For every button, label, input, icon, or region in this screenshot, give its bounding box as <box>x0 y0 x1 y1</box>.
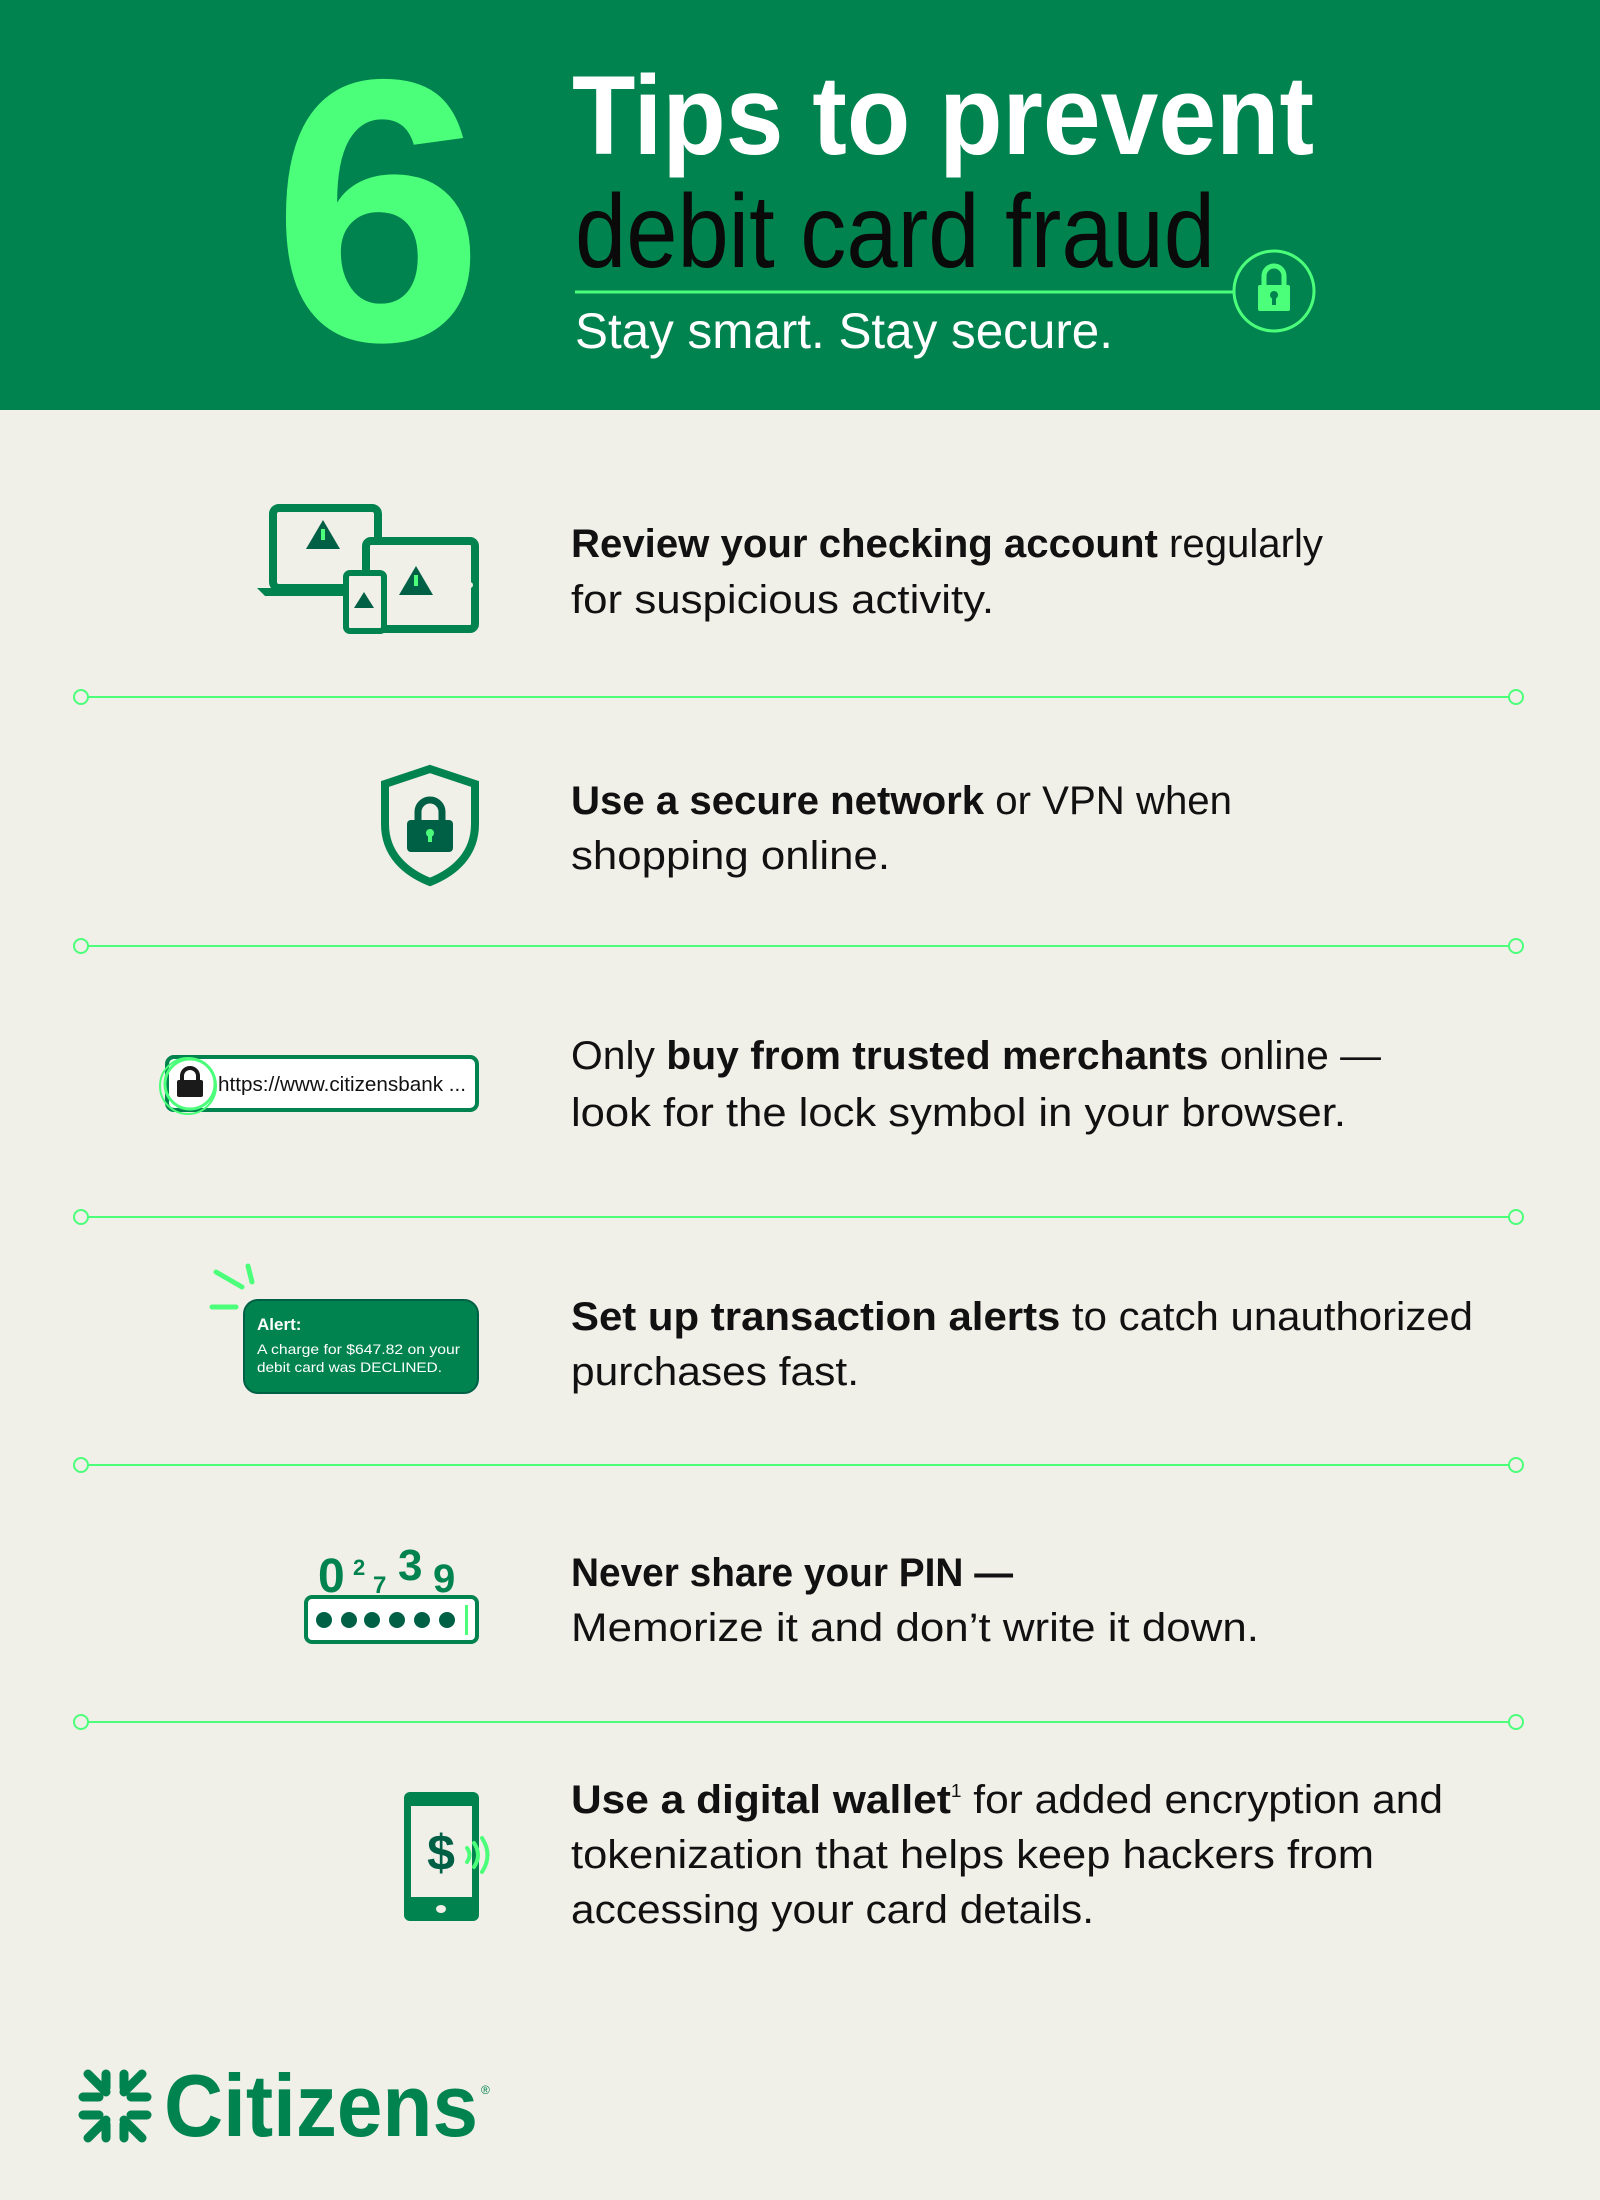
text: tip 6: Use a digital wallet <box>571 1778 951 1822</box>
text: tip 2: Use a secure network or VPN when <box>571 779 1232 823</box>
icon: devices with warnings <box>257 508 475 631</box>
logo: Citizens: ® <box>481 2083 490 2097</box>
icon: PIN entry: 0 <box>318 1550 345 1603</box>
icon: phone wallet <box>404 1792 488 1921</box>
icon: alert message: A charge for $647.82 on your <box>257 1341 460 1357</box>
text: tip 6: for added encryption and <box>961 1778 1443 1822</box>
text: for suspicious activity. <box>571 578 994 622</box>
text: tip 6: 1 <box>951 1781 961 1801</box>
text: purchases fast. <box>571 1350 859 1394</box>
text: shopping online. <box>571 834 890 878</box>
icon: header lock <box>575 251 1314 331</box>
title line 1: Tips to prevent <box>572 53 1314 178</box>
subtitle: Stay smart. Stay secure. <box>575 303 1113 359</box>
icon: phone wallet: $ <box>427 1825 455 1881</box>
title line 2: debit card fraud <box>575 174 1215 290</box>
text: Memorize it and don’t write it down. <box>571 1606 1259 1650</box>
text: tip 4: Set up transaction alerts to catch unauthorized <box>571 1295 1473 1339</box>
icon: url bar <box>160 1057 477 1114</box>
icon: PIN entry: 7 <box>373 1572 386 1599</box>
icon: PIN entry: 9 <box>433 1557 455 1601</box>
icon: alert message: Alert: <box>257 1315 301 1334</box>
icon: alert message <box>212 1266 478 1393</box>
icon: shield lock <box>385 769 475 882</box>
text: tip 5: Never share your PIN — <box>571 1551 1013 1595</box>
icon: PIN entry: 3 <box>398 1541 422 1590</box>
icon: PIN entry <box>306 1541 477 1642</box>
text: tip 3: Only buy from trusted merchants online — <box>571 1034 1381 1078</box>
text: look for the lock symbol in your browser. <box>571 1091 1346 1135</box>
text: tokenization that helps keep hackers from <box>571 1833 1374 1877</box>
text: accessing your card details. <box>571 1888 1094 1932</box>
icon: PIN entry: 2 <box>353 1555 365 1580</box>
logo: Citizens: Citizens <box>164 2056 478 2155</box>
dividers <box>74 690 1523 1729</box>
text: tip 1: Review your checking account regularly <box>571 522 1323 566</box>
big number 6: 6 <box>272 2 484 420</box>
header band <box>0 0 1600 420</box>
icon: url bar: https://www.citizensbank ... <box>218 1074 466 1096</box>
icon: alert message: debit card was DECLINED. <box>257 1359 442 1375</box>
